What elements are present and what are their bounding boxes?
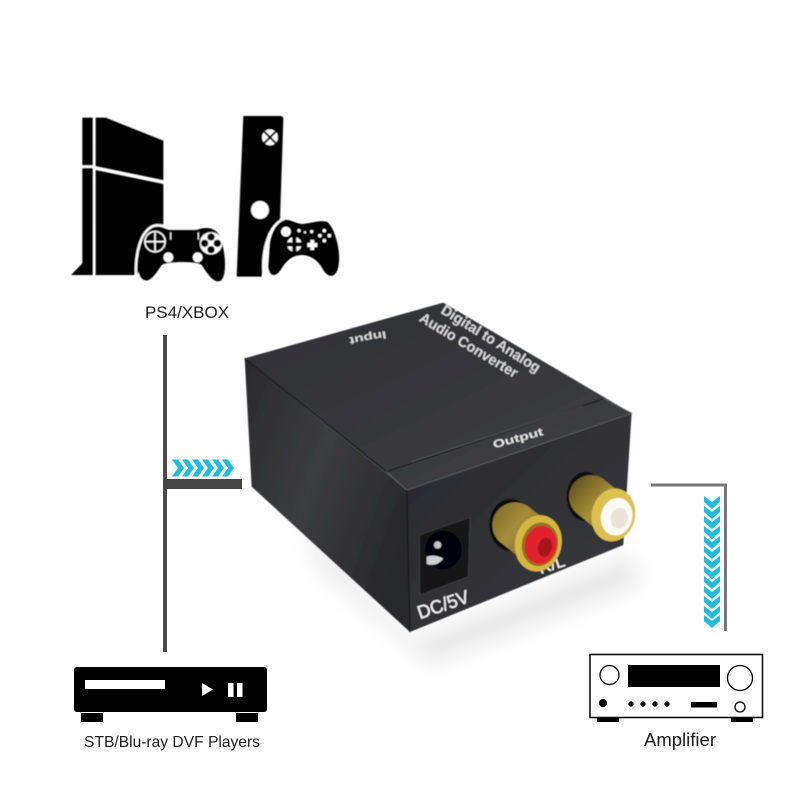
icon: STB / Blu-ray player — [74, 667, 267, 722]
shadow under device — [300, 520, 640, 665]
device text: DC/5V: DC/5V — [414, 586, 472, 623]
device front face — [407, 413, 632, 632]
label: Amplifier: Amplifier — [644, 729, 716, 750]
device text: Audio Converter: Audio Converter — [416, 310, 521, 382]
device lid seams — [245, 358, 632, 632]
label: STB/Blu-ray DVF Players: STB/Blu-ray DVF Players — [84, 734, 260, 751]
device text: Output: Output — [492, 426, 545, 451]
icon: PS4 console — [71, 118, 163, 275]
icon: amplifier — [590, 654, 762, 722]
device text: Input: Input — [348, 328, 387, 346]
icon: PS4 controller — [136, 225, 225, 281]
label: PS4/XBOX: PS4/XBOX — [145, 303, 229, 322]
device left face — [245, 358, 410, 632]
device top face — [245, 303, 632, 490]
device: digital to analog audio converter — [245, 302, 640, 632]
connector: right output line — [651, 485, 726, 631]
white RCA socket — [567, 472, 640, 546]
connector: left input line — [163, 335, 242, 652]
device text: Digital to Analog: Digital to Analog — [438, 302, 543, 376]
red RCA socket — [489, 499, 567, 576]
icon: Xbox controller — [264, 219, 339, 276]
icon: Xbox console — [237, 116, 283, 277]
arrow: blue chevrons pointing right — [172, 459, 234, 477]
icon: PS4 and Xbox consoles with controllers — [71, 116, 339, 281]
device text: R/L: R/L — [537, 553, 567, 578]
DC power jack — [419, 517, 470, 595]
arrow: blue chevrons pointing down — [704, 496, 720, 628]
